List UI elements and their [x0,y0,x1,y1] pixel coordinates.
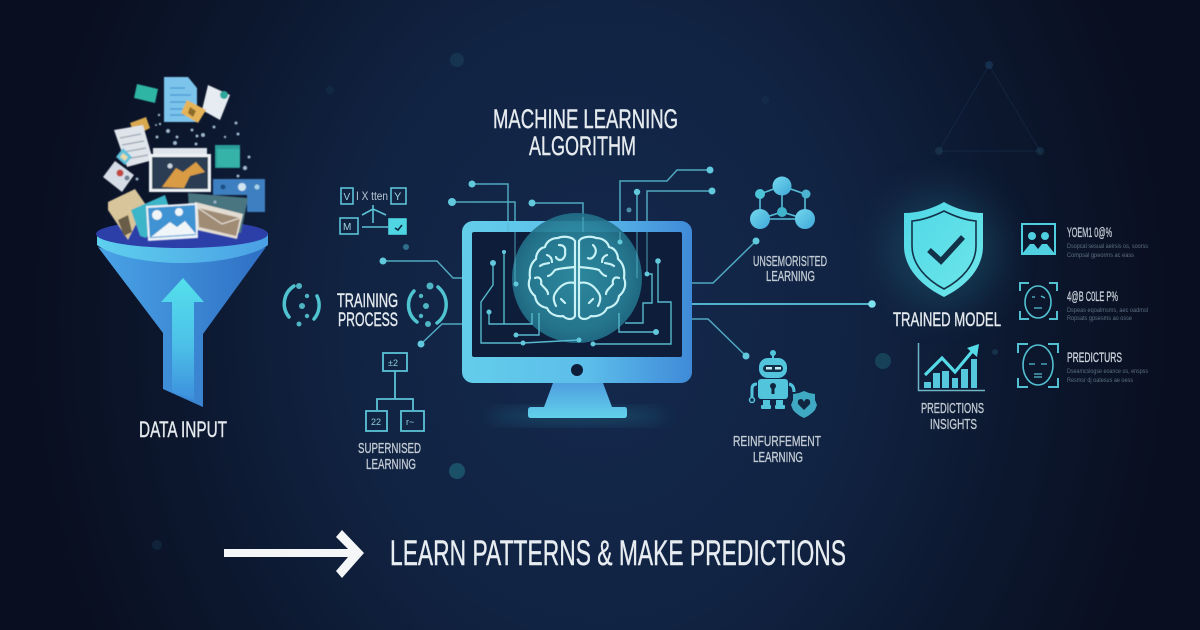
document: white sheet left [114,125,153,167]
icon: decision tree diagram: Y [394,191,402,203]
icon: supervised learning hierarchy: ±2 [388,358,398,368]
monitor [462,221,692,418]
funnel rim [97,233,268,263]
label: reinforcement learning: REINFURFEMENT [733,434,821,450]
label: trained model: TRAINED MODEL [893,309,1001,331]
icon: decision tree diagram: M [343,222,351,233]
monitor screen [472,232,682,357]
icon: data documents falling into the funnel [103,77,265,241]
label: predictions insights [921,401,984,433]
brain glow circle [512,213,642,343]
icon: decision tree diagram [340,188,406,234]
icon: training spinner left [284,283,319,326]
text block: second result: 4@B C0LE P% [1067,289,1118,304]
label: unsupervised learning: UNSEMORISITED [753,254,827,270]
card: green [134,84,158,103]
label: unsupervised learning: LEARNING [766,269,815,285]
document: light blue sheet [164,77,197,122]
heading: machine learning algorithm [493,104,678,161]
photo: central stacked image [149,148,211,192]
icon: brain [529,237,625,319]
icon: face scan [1020,283,1057,319]
label: predictions insights: PREDICTIONS [921,401,984,417]
icon: supervised learning hierarchy: 22 [371,417,381,427]
label: reinforcement learning [733,434,821,466]
text block: second result: Ropsats gpsesms ao osse [1067,315,1132,322]
text block: third result: Dseamcslogse eoance os, enspss [1067,368,1149,375]
label: predictions insights: INSIGHTS [930,417,977,433]
card: small yellow [130,117,150,136]
icon: people picture frame [1022,224,1055,254]
text block: third result: Resmsr dj oatesus ae oess [1067,377,1134,384]
circuit lines inside screen [481,217,671,344]
right hemisphere [579,237,625,319]
label: supervised learning: SUPERNISED [358,441,421,457]
card: red tag [103,161,134,192]
shield glow [886,192,1002,308]
label: training process: PROCESS [338,310,398,331]
icon: supervised learning hierarchy [366,353,424,431]
text block: first result [1067,225,1149,259]
caption: learn patterns and make predictions: LEARN PATTERNS & MAKE PREDICTIONS [390,534,846,573]
label: supervised learning [358,441,421,473]
circuit nodes [380,166,760,360]
icon: funnel [96,220,268,407]
photo: light envelope image [195,202,243,239]
icon: training spinner right [409,282,446,327]
decorative background dots and triangle [152,53,1044,550]
label: unsupervised learning [753,254,827,285]
card: yellow [181,100,206,123]
upward arrow [161,278,204,400]
monitor frame [462,221,692,383]
photo: dark back image [188,193,248,233]
cards: green stack [215,145,240,168]
text block: first result: YOEM1 0@% [1067,225,1112,240]
text block: third result [1067,350,1149,384]
funnel stem and cone [98,247,266,407]
icon: decision tree diagram: I X tten [356,189,388,203]
icon: supervised learning hierarchy: r~ [406,417,414,427]
book: tan [108,189,146,240]
icon: decision tree diagram: V [344,192,350,203]
icon: robot with shield badge [750,350,817,418]
monitor button [571,364,583,376]
heading: machine learning algorithm: MACHINE LEARNING [493,104,678,134]
label: training process: TRAINING [337,291,398,312]
text block: first result: Dsopcal sesual aeirsis os, soorss [1067,243,1149,250]
document: white sheet right [202,85,230,120]
icon: shield with check [904,202,983,297]
monitor stand [528,383,627,418]
funnel opening [96,220,268,248]
glow behind monitor [487,410,667,422]
left hemisphere [529,237,575,319]
photo: front image with mountains [146,203,198,241]
heading: machine learning algorithm: ALGORITHM [529,131,636,161]
label: data input: DATA INPUT [139,417,227,442]
text block: second result [1067,289,1148,322]
card: teal [131,195,170,238]
label: reinforcement learning: LEARNING [753,450,803,466]
text block: first result: Compsal gpeorms ac eass [1067,252,1135,259]
particles [136,114,250,204]
label: training process [337,291,398,331]
text block: third result: PREDICTURS [1067,350,1122,365]
circuit lines around monitor [383,170,756,356]
card: small teal [116,148,132,165]
text block: second result: Dspeas eqoalmsms, aec oadmsl [1067,307,1148,314]
icon: face scan large [1018,344,1058,387]
label: supervised learning: LEARNING [366,457,416,473]
arrow: bottom white arrow [224,530,364,578]
icon: unsupervised network [750,176,815,229]
main connector to trained model [692,300,876,308]
panel: blue tiles [213,179,265,212]
chart: predictions bar chart with trend arrow [918,343,985,390]
